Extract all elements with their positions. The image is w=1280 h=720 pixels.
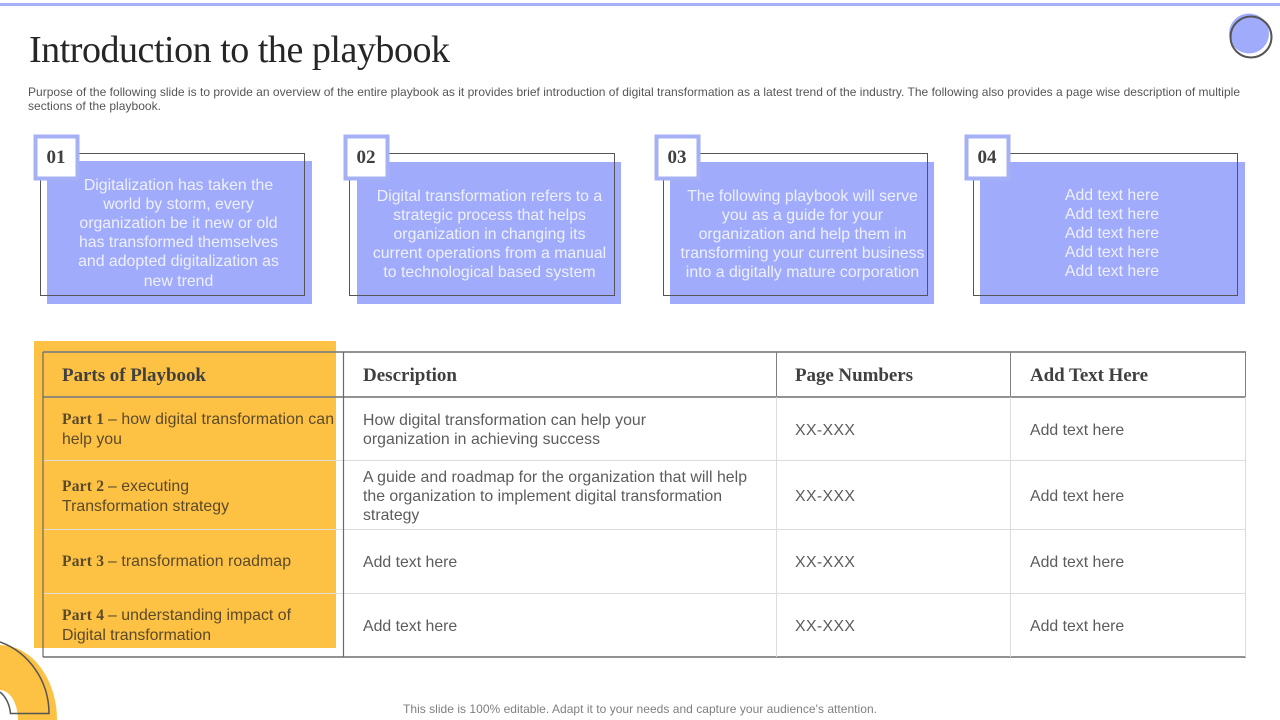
card 01 text: new trend xyxy=(144,273,213,290)
table header row: Page Numbers xyxy=(795,365,913,386)
table row: part 3 xyxy=(62,553,1124,571)
card 04 text: Add text here xyxy=(1065,263,1159,280)
table row: part 4: Digital transformation xyxy=(62,627,211,644)
card 01 text: and adopted digitalization as xyxy=(78,253,279,270)
title: Introduction to the playbook xyxy=(29,29,450,71)
card 04 text: Add text here xyxy=(1065,206,1159,223)
card 01 text: world by storm, every xyxy=(102,196,254,213)
table row: part 2: Transformation strategy xyxy=(62,498,229,515)
table row: part 1: How digital transformation can help your xyxy=(363,412,647,429)
card 04 text xyxy=(1065,187,1159,280)
card 04 text: Add text here xyxy=(1065,187,1159,204)
card 03 number badge xyxy=(656,136,698,178)
card 04 text: Add text here xyxy=(1065,225,1159,242)
icon: corner circle xyxy=(1229,14,1272,58)
card 03 text xyxy=(681,188,925,281)
card 02 text: to technological based system xyxy=(383,264,596,281)
table row: part 1: Add text here xyxy=(1030,422,1124,439)
card 04 number badge xyxy=(966,136,1008,178)
table row: part 4: Add text here xyxy=(363,618,457,635)
table row: part 2: strategy xyxy=(363,507,419,524)
footer note: This slide is 100% editable. Adapt it to your needs and capture your audience's attention. xyxy=(403,702,877,716)
card 02 text: strategic process that helps xyxy=(393,207,586,224)
table header row: Description xyxy=(363,365,457,386)
table row: part 2: A guide and roadmap for the organization that will help xyxy=(363,469,747,486)
table row: part 2: XX-XXX xyxy=(795,488,855,505)
card 03 text: organization and help them in xyxy=(699,226,906,243)
table row: part 2: Add text here xyxy=(1030,488,1124,505)
intro text block xyxy=(28,85,1240,113)
card 02 text xyxy=(373,188,606,281)
table row: part 2 xyxy=(62,469,1124,524)
card 03 text: you as a guide for your xyxy=(722,207,884,224)
card 04 number badge: 04 xyxy=(978,147,997,168)
intro text block: Purpose of the following slide is to provide an overview of the entire playbook as it provides brief introduction of digital transformation as a latest trend of the industry. The following also provides a page wise description of multiple xyxy=(28,85,1240,99)
panel: card 02 xyxy=(346,136,621,304)
table row: part 4: – understanding impact of xyxy=(108,607,292,624)
card 02 number badge xyxy=(346,136,388,178)
table row: part 2: the organization to implement digital transformation xyxy=(363,488,722,505)
table row: part 1: help you xyxy=(62,431,122,448)
table row: part 1: XX-XXX xyxy=(795,422,855,439)
table header row: Add Text Here xyxy=(1030,365,1148,386)
table row: part 4: Part 4 xyxy=(62,607,104,624)
table: parts of playbook xyxy=(43,352,1246,657)
intro text block: sections of the playbook. xyxy=(28,99,161,113)
card 02 text: current operations from a manual xyxy=(373,245,606,262)
table row: part 2: Part 2 xyxy=(62,478,104,495)
icon: corner arc xyxy=(0,642,57,720)
table header row: Parts of Playbook xyxy=(62,365,206,386)
card 01 text: organization be it new or old xyxy=(79,215,278,232)
table row: part 1 xyxy=(62,411,1124,448)
table row: part 4: XX-XXX xyxy=(795,618,855,635)
card 01 text xyxy=(78,177,279,290)
table row: part 3: Add text here xyxy=(1030,554,1124,571)
table row: part 3: Part 3 xyxy=(62,553,104,570)
table row: part 1: organization in achieving success xyxy=(363,431,600,448)
card 03 text: The following playbook will serve xyxy=(687,188,918,205)
card 03 text: transforming your current business xyxy=(681,245,925,262)
table row: part 2: – executing xyxy=(108,478,189,495)
card 03 number badge: 03 xyxy=(668,147,686,168)
card 03 text: into a digitally mature corporation xyxy=(686,264,919,281)
table row: part 3: Add text here xyxy=(363,554,457,571)
card 04 text: Add text here xyxy=(1065,244,1159,261)
table row: part 3: – transformation roadmap xyxy=(108,553,291,570)
card 01 text: has transformed themselves xyxy=(79,234,278,251)
top accent bar xyxy=(0,3,1280,6)
table row: part 1: – how digital transformation can xyxy=(108,411,334,428)
table header row xyxy=(62,365,1148,386)
table row: part 3: XX-XXX xyxy=(795,554,855,571)
card 01 number badge xyxy=(36,136,78,178)
panel: yellow highlight behind first column xyxy=(34,341,336,648)
table row: part 4 xyxy=(62,607,1124,644)
card 02 number badge: 02 xyxy=(356,147,376,168)
card 02 text: Digital transformation refers to a xyxy=(377,188,602,205)
panel: card 03 xyxy=(656,136,934,304)
card 01 number badge: 01 xyxy=(46,147,66,168)
panel: card 04 xyxy=(966,136,1245,304)
table row: part 1: Part 1 xyxy=(62,411,104,428)
table row: part 4: Add text here xyxy=(1030,618,1124,635)
panel: card 01 xyxy=(36,136,312,304)
card 01 text: Digitalization has taken the xyxy=(84,177,273,194)
card 02 text: organization in changing its xyxy=(393,226,586,243)
